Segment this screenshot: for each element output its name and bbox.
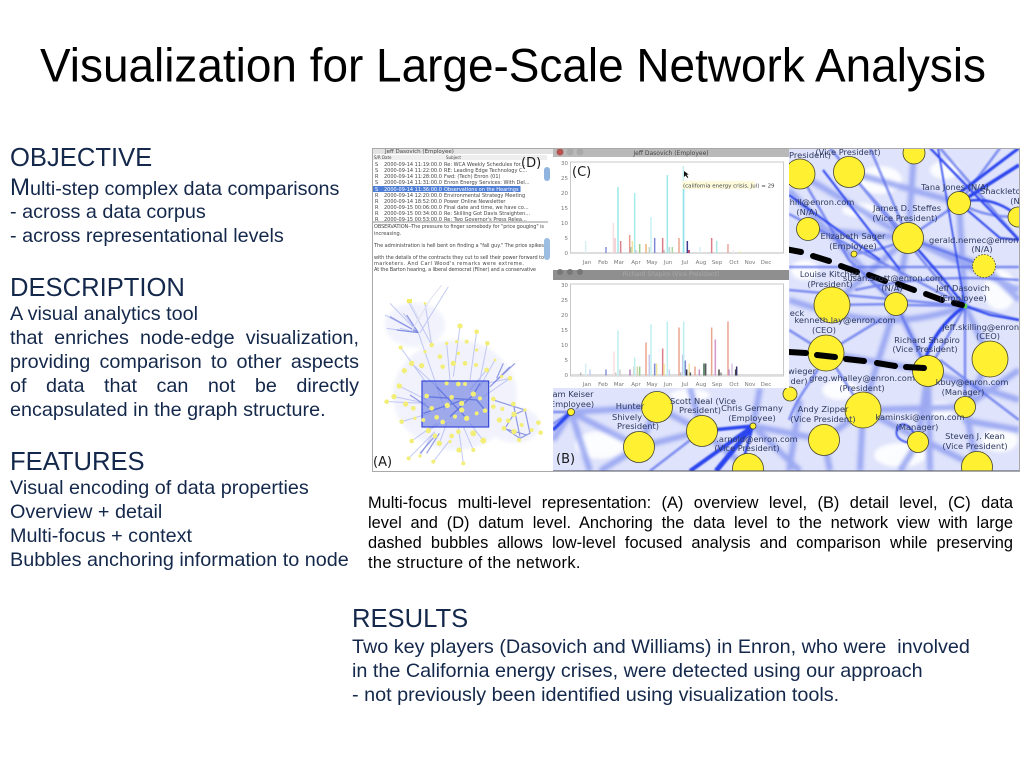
panel: message list and datum view (D): increasing. — [374, 231, 402, 237]
network labels: (Vice President) — [815, 147, 881, 157]
chart axes labels: May — [646, 382, 658, 388]
text block: results: - not previously been identified using visualization tools. — [352, 684, 839, 706]
network labels: Louise Kitchen — [800, 269, 860, 279]
chart axes labels: Aug — [696, 260, 706, 266]
figure caption: the structure of the network. — [368, 554, 581, 572]
network labels: (Vice President) — [872, 213, 938, 223]
text block: objective — [10, 144, 339, 247]
chart axes labels: Mar — [614, 382, 625, 388]
text block: features: Multi-focus + context — [10, 525, 192, 547]
level labels — [373, 156, 591, 470]
network labels: Jeff Dasovich — [935, 283, 990, 293]
panel: message list and datum view (D): R — [375, 211, 379, 217]
panel: message list and datum view (D): 2000-09-14 11:36:00.0 — [384, 187, 442, 193]
network labels: President) — [617, 421, 659, 431]
overview selection rectangle — [422, 381, 489, 427]
level labels: (C) — [572, 165, 591, 180]
network labels: kenneth.lay@enron.com — [794, 315, 896, 325]
text block: results: RESULTS — [352, 605, 468, 633]
chart axes labels: 15 — [561, 206, 568, 212]
panel: message list and datum view (D): OBSERVATION--The pressure to finger somebody for "price gouging" is — [374, 224, 544, 230]
chart axes labels: Sep — [712, 382, 723, 388]
level labels: (A) — [373, 455, 392, 470]
chart axes labels: Aug — [696, 382, 706, 388]
network labels: (N/A) — [971, 244, 993, 254]
chart axes labels: Nov — [745, 260, 756, 266]
network labels: (Manager) — [896, 422, 938, 432]
network labels: eck — [790, 308, 804, 318]
panel: message list and datum view (D): 2000-09-14 18:52:00.0 — [384, 199, 442, 205]
chart axes labels: Dec — [761, 382, 771, 388]
panel: message list and datum view (D): marketers. And Carl Wood's remarks were extreme. — [374, 261, 524, 267]
text block: description: providing comparison to other aspects — [10, 351, 359, 373]
network labels: susan.scott@enron.com — [843, 273, 943, 283]
level labels: (B) — [556, 452, 575, 467]
text block: results: Two key players (Dasovich and Williams) in Enron, who were involved — [352, 636, 970, 658]
panel: message list and datum view (D): 2000-09-15 00:34:00.0 — [384, 211, 442, 217]
text block: results — [352, 605, 970, 706]
text block: description: A visual analytics tool — [10, 303, 198, 325]
network labels: (CEO) — [976, 331, 1000, 341]
network labels: Andy Zipper — [798, 404, 849, 414]
panel: message list and datum view (D) — [372, 148, 553, 285]
network labels: Chris Germany — [721, 403, 783, 413]
network labels: (Manager) — [942, 387, 984, 397]
text block: features: Bubbles anchoring information to node — [10, 549, 349, 571]
figure caption: dashed bubbles allows low-level focused analysis and comparison while preserving — [368, 534, 1013, 552]
chart axes labels: 0 — [564, 373, 568, 379]
chart axes labels: May — [646, 260, 658, 266]
text block: objective: Multi-step complex data comparisons — [10, 174, 339, 201]
panel: overview graph (A) — [384, 277, 543, 465]
figure caption: Multi-focus multi-level representation: (A) overview level, (B) detail level, (C) data — [368, 494, 1013, 512]
chart axes labels: Sep — [712, 260, 723, 266]
panel: message list and datum view (D): Environmental Strategy Meeting — [444, 193, 525, 199]
network labels: Elizabeth Sager — [821, 231, 886, 241]
network labels: kbuy@enron.com — [936, 377, 1008, 387]
panel: message list and datum view (D): Enron Energy Services: With Del... — [444, 180, 530, 186]
network labels: am Keiser — [552, 389, 594, 399]
panel: message list and datum view (D): Re: WCA Weekly Schedules for... — [444, 162, 525, 168]
panel: message list and datum view (D): 2000-09-14 11:28:00.0 — [384, 174, 442, 180]
network labels: greg.whalley@enron.com — [809, 373, 915, 383]
network labels: wieger — [788, 366, 817, 376]
chart axes labels: 10 — [561, 221, 568, 227]
tooltip: (california energy crisis, Jul) = 29 — [683, 184, 775, 190]
chart axes labels: Nov — [745, 382, 756, 388]
panel: data level charts (C) — [553, 148, 789, 388]
panel: message list and datum view (D): Re: Two Governor's Press Relea... — [444, 217, 527, 223]
network labels: Shively — [612, 412, 642, 422]
network labels: (N/A) — [881, 283, 903, 293]
network labels: Richard Shapiro — [894, 335, 960, 345]
network labels: President) — [679, 405, 721, 415]
panel: message list and datum view (D): Final date and time, we have co... — [444, 205, 529, 211]
chart: Richard Shapiro bars — [581, 322, 737, 376]
network labels: hill@enron.com — [790, 197, 854, 207]
network labels: (Vice President) — [942, 441, 1008, 451]
panel: message list and datum view (D): 2000-09-14 11:31:00.0 — [384, 180, 442, 186]
network labels: (Vice President) — [892, 344, 958, 354]
network labels: (President) — [839, 383, 885, 393]
chart: Jeff Dasovich bars — [586, 166, 740, 253]
chart axes labels: 5 — [564, 236, 568, 242]
network labels: Hunter — [616, 401, 645, 411]
network labels: der) — [790, 376, 808, 386]
chart axes labels: Oct — [729, 382, 740, 388]
panel: message list and datum view (D): S — [375, 168, 378, 174]
network labels: (N/A) — [796, 207, 818, 217]
figure: multi-level network visualization — [372, 148, 1020, 472]
text block: results: in the California energy crises, were detected using our approach — [352, 660, 923, 682]
text block: description: DESCRIPTION — [10, 274, 185, 302]
panel frame — [372, 148, 1020, 472]
text block: objective: - across a data corpus — [10, 201, 206, 223]
panel: message list and datum view (D): R — [375, 174, 379, 180]
chart axes labels: Jul — [681, 260, 689, 266]
network labels: gerald.nemec@enron. — [929, 235, 1021, 245]
title: Visualization for Large-Scale Network Analysis — [40, 38, 986, 92]
network labels — [550, 147, 1024, 453]
chart axes labels: 30 — [561, 283, 568, 289]
panel: message list and datum view (D): S — [375, 162, 378, 168]
chart axes labels: Jan — [582, 382, 592, 388]
text block: description: that enriches node-edge visualization, — [10, 327, 359, 349]
network labels: Steven J. Kean — [945, 431, 1005, 441]
chart axes labels: Mar — [614, 260, 625, 266]
text block: description: of data that can not be directly — [10, 375, 359, 397]
text block: objective: - across representational levels — [10, 225, 284, 247]
network labels: .arnold@enron.com — [716, 434, 798, 444]
panel: message list and datum view (D): Re: Skilling Got Davis Straighten... — [444, 211, 530, 217]
network labels: (Employee) — [829, 241, 877, 251]
panel: message list and datum view (D): 2000-09-15 00:06:00.0 — [384, 205, 442, 211]
network labels: Employee) — [550, 399, 594, 409]
panel: message list and datum view (D): 2000-09-14 11:19:00.0 — [384, 162, 442, 168]
chart axes labels: 30 — [561, 161, 568, 167]
network labels: (President) — [807, 279, 853, 289]
chart axes labels: 20 — [561, 191, 568, 197]
chart axes labels: 15 — [561, 328, 568, 334]
network labels: Scott Neal (Vice — [670, 396, 736, 406]
panel: message list and datum view (D): S — [375, 187, 378, 193]
network labels: jeff.skilling@enron. — [941, 322, 1022, 332]
panel: message list and datum view (D): Subject — [446, 155, 461, 160]
panel: message list and datum view (D): Power Online Newsletter — [444, 199, 506, 205]
overview nodes — [384, 300, 543, 465]
panel: data level charts (C): Richard Shapiro (Vice President) — [623, 271, 719, 278]
network labels: James D. Steffes — [872, 203, 941, 213]
panel: message list and datum view (D): R — [375, 199, 379, 205]
network labels: President) — [789, 150, 831, 160]
tooltip — [682, 171, 775, 190]
panel: message list and datum view (D): 2000-09-14 12:20:00.0 — [384, 193, 442, 199]
panel: message list and datum view (D): R — [375, 205, 379, 211]
panel: message list and datum view (D): Jeff Dasovich (Employee) — [384, 149, 454, 155]
text block: features — [10, 448, 349, 571]
chart axes labels: Jun — [663, 382, 673, 388]
panel: data level charts (C): Jeff Dasovich (Employee) — [632, 150, 709, 157]
network labels: (CEO) — [812, 325, 836, 335]
network labels: (N — [1010, 196, 1020, 206]
text block: features: FEATURES — [10, 448, 145, 476]
chart axes labels: Jan — [582, 260, 592, 266]
panel: message list and datum view (D): 2000-09-15 00:53:00.0 — [384, 217, 442, 223]
figure caption: level and (D) datum level. Anchoring the data level to the network view with large — [368, 514, 1013, 532]
panel: message list and datum view (D): Observations on the Hearings in... — [444, 187, 530, 193]
network labels: (Employee) — [728, 413, 776, 423]
chart axes labels: Oct — [729, 260, 740, 266]
chart axes labels: Jun — [663, 260, 673, 266]
panel: message list and datum view (D): S/R Date — [374, 155, 392, 160]
chart axes labels: 0 — [564, 251, 568, 257]
panel: message list and datum view (D): Fwd: (Tech) Enron (01) — [444, 174, 501, 180]
chart axes labels — [561, 161, 771, 388]
network labels: (Employee) — [939, 293, 987, 303]
chart axes labels: Feb — [598, 382, 608, 388]
panel: message list and datum view (D): with the details of the contracts they cut to sell their power forward to — [374, 255, 544, 261]
chart axes labels: Dec — [761, 260, 771, 266]
panel: message list and datum view (D): At the Barton hearing, a liberal democrat (Filner) and a conservative — [374, 267, 536, 273]
chart axes labels: 20 — [561, 313, 568, 319]
chart axes labels: 5 — [564, 358, 568, 364]
text block: description — [10, 274, 359, 421]
chart axes labels: Jul — [681, 382, 689, 388]
chart axes labels: Apr — [631, 260, 641, 266]
text block: features: Visual encoding of data properties — [10, 477, 309, 499]
panel: message list and datum view (D): R — [375, 217, 379, 223]
chart axes labels: 10 — [561, 343, 568, 349]
dashed anchoring bubbles — [785, 249, 962, 368]
panel: message list and datum view (D): The administration is hell bent on finding a "fall guy." The price spikes — [373, 243, 544, 249]
panel: network detail view (B) — [550, 142, 1024, 484]
chart axes labels: 25 — [561, 298, 568, 304]
network labels: (Vice President) — [714, 443, 780, 453]
figure caption — [368, 494, 1013, 572]
network labels: kaminski@enron.com — [875, 412, 965, 422]
panel: message list and datum view (D): 2000-09-14 11:22:00.0 — [384, 168, 442, 174]
chart axes labels: Apr — [631, 382, 641, 388]
panel: message list and datum view (D): RE: Leading Edge Technology C... — [444, 168, 528, 174]
chart axes labels: 25 — [561, 176, 568, 182]
chart axes labels: Feb — [598, 260, 608, 266]
text block: features: Overview + detail — [10, 501, 162, 523]
text block: description: encapsulated in the graph structure. — [10, 399, 326, 421]
level labels: (D) — [521, 156, 541, 171]
network labels: (Vice President) — [790, 414, 856, 424]
text block: objective: OBJECTIVE — [10, 144, 152, 172]
panel: message list and datum view (D): R — [375, 193, 379, 199]
network labels: Tana Jones (N/A) — [920, 182, 989, 192]
network nodes — [568, 142, 1024, 484]
panel: message list and datum view (D): S — [375, 180, 378, 186]
